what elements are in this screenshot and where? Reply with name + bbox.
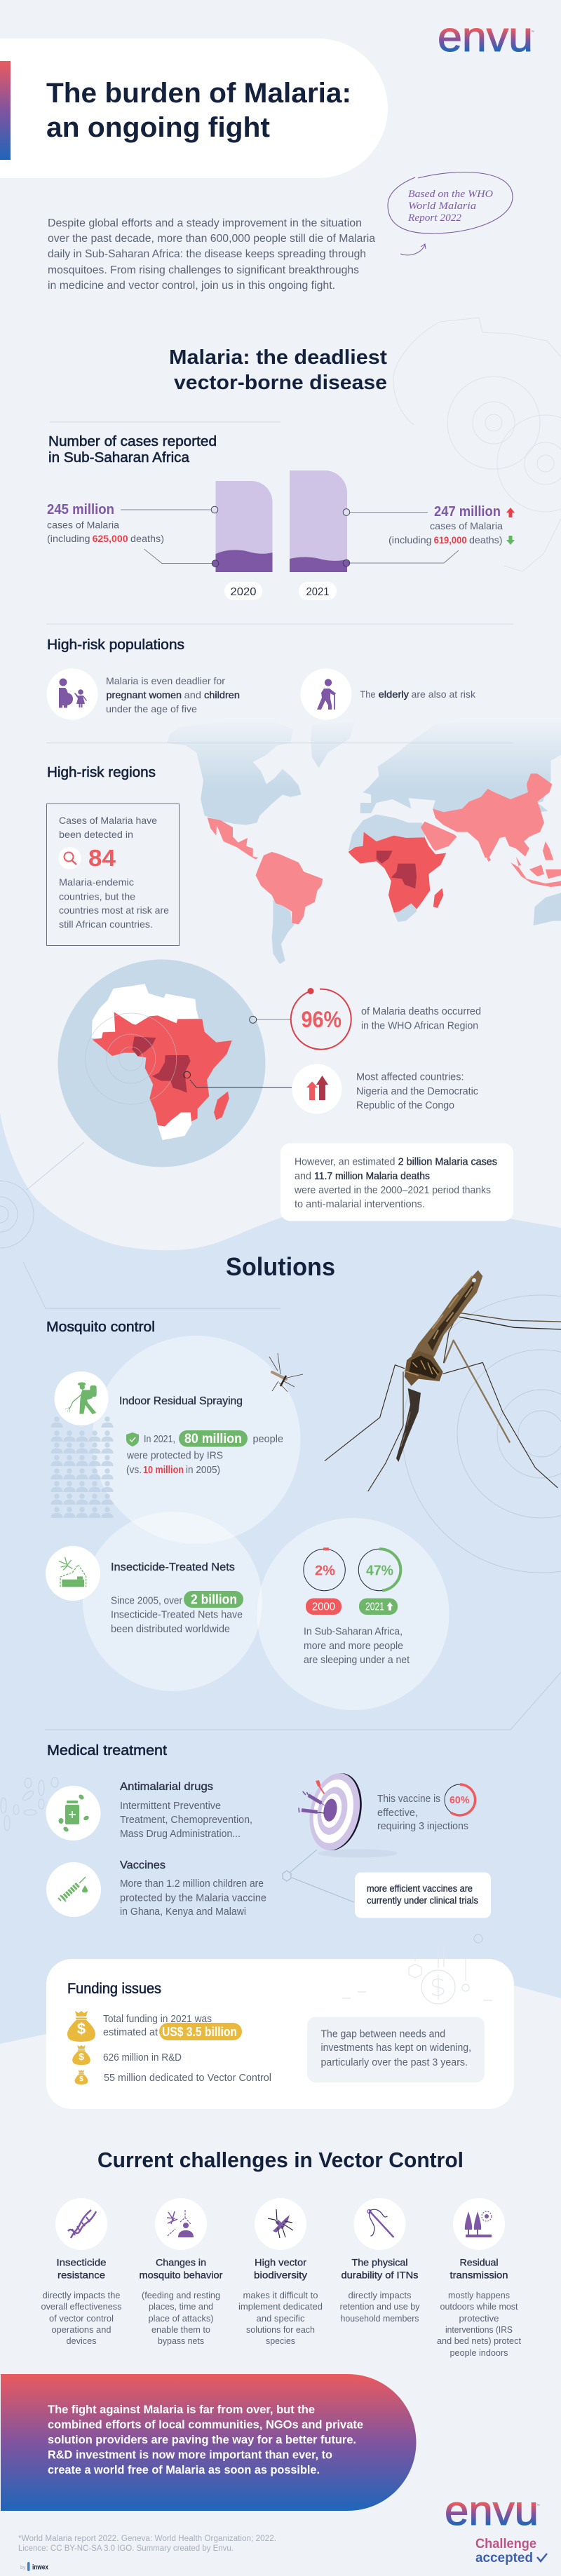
panel: residual transmission — [437, 2198, 521, 2358]
panel: averted cases card: were averted in the 2000–2021 period thanks — [294, 1185, 491, 1196]
footnote: Licence: CC BY-NC-SA 3.0 IGO. Summary created by Envu. — [18, 2544, 234, 2553]
panel: 84 countries box: still African countries. — [59, 918, 153, 930]
footnote: *World Malaria report 2022. Geneva: World Health Organization; 2022. — [18, 2535, 276, 2543]
connector with hexagon — [283, 1850, 354, 1902]
callout: 2020: deaths) — [130, 533, 164, 544]
callout: 2020: cases of Malaria — [47, 519, 119, 530]
panel: insecticide resistance: operations and — [52, 2324, 111, 2335]
panel: residual transmission: protective — [459, 2313, 499, 2324]
decorative faint coin — [342, 1934, 492, 2004]
callout: clinical trials — [355, 1872, 491, 1918]
callout: 2021: cases of Malaria — [430, 520, 503, 531]
credit: by inwex — [20, 2562, 48, 2572]
panel: insecticide resistance: resistance — [58, 2270, 105, 2281]
chart: 96 percent ring — [291, 988, 351, 1050]
panel: mosquito behavior: bypass nets — [158, 2336, 204, 2346]
chart: 47 percent ring: 47% — [366, 1564, 393, 1579]
panel: elderly: are also at risk — [411, 689, 476, 700]
chart: 96 percent ring: 96% — [302, 1007, 342, 1032]
logo: envu top: envu — [438, 13, 533, 60]
panel: vector biodiversity: and specific — [257, 2313, 305, 2324]
panel: mosquito behavior: Changes in — [156, 2257, 206, 2268]
panel: vector biodiversity: implement dedicated — [238, 2301, 323, 2312]
bar chart: 2020 — [230, 586, 257, 598]
panel: elderly: elderly — [379, 689, 409, 700]
panel: insecticide resistance: overall effectiveness — [41, 2301, 122, 2312]
pill: 2000: 2000 — [312, 1601, 335, 1613]
panel: vector biodiversity: High vector — [255, 2257, 306, 2268]
panel: vaccines: Vaccines — [120, 1859, 165, 1871]
title — [46, 78, 351, 143]
panel: ITN durability: durability of ITNs — [341, 2270, 418, 2281]
chart: 2 percent ring: 2% — [315, 1564, 335, 1579]
panel: sleeping under a net: more and more people — [304, 1641, 403, 1652]
callout: 2021: (including — [388, 534, 432, 545]
heading: high-risk regions: High-risk regions — [47, 765, 156, 780]
map: Africa in circle — [58, 959, 265, 1167]
icon: target with syringes — [299, 1768, 398, 1857]
panel: pregnant women and children: pregnant women — [107, 689, 182, 700]
panel: mosquito behavior: places, time and — [149, 2301, 213, 2312]
panel: pregnant women and children — [46, 669, 240, 719]
chart: 2 percent ring — [304, 1549, 345, 1591]
light blue solutions background band — [0, 1112, 561, 2044]
high burden Africa — [349, 832, 446, 913]
text: vaccine effectiveness: requiring 3 injections — [377, 1821, 468, 1832]
panel: 84 countries box: Cases of Malaria have — [59, 815, 157, 826]
panel: pregnant women and children: under the age of five — [106, 703, 197, 714]
intro paragraph: mosquitoes. From rising challenges to significant breakthroughs — [48, 264, 359, 276]
bar chart: 2021 — [306, 586, 330, 598]
intro paragraph: over the past decade, more than 600,000 people still die of Malaria — [48, 233, 375, 245]
panel: residual transmission: transmission — [450, 2270, 508, 2281]
footnote — [18, 2535, 276, 2553]
icon: mother and child — [59, 679, 87, 708]
callout: funding gap: particularly over the past 3 years. — [321, 2057, 468, 2068]
callout: funding gap: The gap between needs and — [321, 2029, 445, 2040]
icon: DNA — [68, 2210, 96, 2238]
icon: magnifier — [59, 847, 81, 869]
title: an ongoing fight — [46, 112, 270, 143]
banner: closing statement: solution providers are paving the way for a better future. — [48, 2434, 356, 2446]
arrow: note pointer — [400, 244, 426, 255]
callout: clinical trials: currently under clinical trials — [367, 1895, 478, 1906]
panel: ITN durability: directly impacts — [348, 2290, 412, 2300]
pill: 80 million: 80 million — [184, 1432, 242, 1446]
panel: indoor residual spraying: (vs. — [126, 1465, 142, 1476]
panel: elderly: The — [360, 689, 376, 700]
heading: deadliest disease: Malaria: the deadliest — [169, 346, 387, 369]
panel: funding issues: 55 million dedicated to Vector Control — [104, 2073, 271, 2084]
gradient accent bar — [0, 61, 11, 160]
handwritten note — [388, 172, 513, 233]
chart: 47 percent ring — [358, 1549, 400, 1591]
panel: vector biodiversity — [238, 2198, 323, 2346]
panel: antimalarial drugs: Intermittent Preventive — [120, 1801, 221, 1812]
panel: ITN durability — [339, 2198, 420, 2324]
pill: 2000 — [306, 1599, 342, 1615]
panel: indoor residual spraying: in 2005) — [186, 1465, 220, 1476]
panel: sleeping under a net: are sleeping under a net — [304, 1655, 410, 1666]
panel: 84 countries box: Malaria-endemic — [59, 876, 134, 888]
panel: averted cases card: and — [295, 1171, 311, 1182]
panel: ITN durability: retention and use by — [339, 2301, 420, 2312]
panel: cases reported — [47, 434, 515, 600]
panel: vector biodiversity: solutions for each — [246, 2324, 315, 2335]
heading: high-risk populations: High-risk populations — [47, 637, 184, 653]
panel: 84 countries box — [46, 804, 180, 945]
panel: vector biodiversity: species — [266, 2336, 295, 2346]
panel: averted cases card: 11.7 million Malaria deaths — [314, 1171, 430, 1182]
heading: mosquito control: Mosquito control — [46, 1320, 155, 1335]
callout: 2021 — [343, 504, 515, 567]
panel: indoor residual spraying: Indoor Residual Spraying — [119, 1395, 243, 1407]
icon: money bag large: $ — [77, 2020, 86, 2038]
tagline: challenge accepted — [475, 2537, 547, 2565]
panel: 84 countries box: countries, but the — [59, 890, 135, 902]
panel: 84 countries box: been detected in — [59, 829, 133, 840]
heading: solutions: Solutions — [226, 1252, 335, 1281]
logo: envu top: ™ — [531, 30, 534, 34]
heading: medical treatment: Medical treatment — [47, 1743, 167, 1758]
decorative faint pills — [1, 1777, 58, 1831]
panel: vector biodiversity: makes it difficult to — [243, 2290, 318, 2300]
icon: up arrow — [506, 508, 515, 517]
callout: 96%: in the WHO African Region — [361, 1021, 478, 1032]
panel: 84 countries box: 84 — [88, 845, 116, 871]
panel: funding issues: estimated at — [103, 2027, 158, 2038]
panel: mosquito behavior: mosquito behavior — [139, 2270, 223, 2281]
pill: 2021: 2021 — [365, 1601, 384, 1613]
pill: 3.5 billion: US$ 3.5 billion — [162, 2025, 237, 2039]
decorative rings behind mosquito — [403, 1295, 561, 1573]
icon: needle and thread — [367, 2209, 394, 2237]
world map — [167, 722, 561, 964]
panel: residual transmission: Residual — [460, 2257, 498, 2268]
text: vaccine effectiveness: This vaccine is — [377, 1794, 440, 1805]
panel: indoor residual spraying: 10 million — [143, 1465, 184, 1476]
icon: down arrow — [506, 536, 515, 545]
panel: vector biodiversity: biodiversity — [254, 2270, 307, 2281]
panel: insecticide resistance: directly impacts the — [42, 2290, 121, 2300]
heading: current challenges: Current challenges in Vector Control — [97, 2148, 464, 2172]
panel: funding issues — [46, 1934, 514, 2109]
panel: residual transmission: people indoors — [450, 2347, 508, 2358]
panel: residual transmission: outdoors while most — [440, 2301, 518, 2312]
logo: envu bottom: envu — [445, 2488, 539, 2534]
callout: 2020: 245 million — [47, 502, 114, 517]
pill: 2 billion: 2 billion — [191, 1593, 237, 1607]
panel: antimalarial drugs — [46, 1781, 252, 1841]
icon: bed net — [59, 1557, 86, 1587]
panel: vaccines: More than 1.2 million children are — [120, 1878, 264, 1890]
panel: averted cases card — [280, 1143, 513, 1221]
title card — [0, 39, 388, 178]
icon: pill bottle — [59, 1794, 90, 1833]
panel: antimalarial drugs: Antimalarial drugs — [120, 1781, 213, 1793]
callout: 2020: (including — [47, 533, 90, 544]
image: large mosquito — [325, 1270, 561, 1491]
icon: trees and sun — [465, 2211, 492, 2237]
callout: most affected countries: Nigeria and the Democratic — [356, 1086, 478, 1097]
bar chart — [216, 470, 347, 600]
subheading: in Sub-Saharan Africa — [48, 450, 190, 466]
decorative ring and line bottom left — [0, 1142, 84, 1308]
icon: sprayer worker — [65, 1382, 97, 1414]
panel: insecticide resistance — [41, 2198, 122, 2346]
pale circles behind solutions — [83, 1336, 449, 1710]
handwritten note: World Malaria — [408, 201, 476, 212]
panel: indoor residual spraying: people — [252, 1434, 283, 1445]
panel: mosquito behavior: enable them to — [151, 2324, 210, 2335]
panel: funding issues: 626 million in R&D — [103, 2052, 182, 2063]
panel: insecticide resistance: of vector control — [49, 2313, 114, 2324]
callout: most affected countries — [184, 1064, 478, 1113]
panel: averted cases card: to anti-malarial interventions. — [295, 1199, 425, 1210]
icon: money bag small — [75, 2070, 88, 2084]
heading: deadliest disease: vector-borne disease — [174, 372, 387, 394]
banner: closing statement: The fight against Malaria is far from over, but the — [48, 2404, 315, 2416]
panel: sleeping under a net: In Sub-Saharan Africa, — [304, 1627, 403, 1638]
icon: money bag medium — [72, 2045, 90, 2065]
intro paragraph — [48, 217, 375, 292]
panel: indoor residual spraying: were protected by IRS — [126, 1450, 223, 1461]
panel: insecticide treated nets: been distributed worldwide — [111, 1624, 230, 1635]
panel: 84 countries box: countries most at risk are — [59, 904, 169, 916]
banner: closing statement: combined efforts of local communities, NGOs and private — [48, 2419, 363, 2432]
callout: 2020: 625,000 — [93, 533, 128, 544]
panel: vaccines: protected by the Malaria vaccine — [120, 1893, 266, 1904]
panel: insecticide treated nets: Insecticide-Treated Nets — [111, 1561, 235, 1573]
panel: ITN durability: household members — [341, 2313, 419, 2324]
panel: pregnant women and children: and — [184, 689, 201, 700]
panel: indoor residual spraying — [50, 1371, 283, 1518]
panel: insecticide resistance: devices — [66, 2336, 97, 2346]
text: vaccine effectiveness: effective, — [377, 1808, 418, 1819]
credit: by inwex: inwex — [32, 2563, 48, 2572]
panel: funding issues: Total funding in 2021 was — [103, 2014, 212, 2025]
panel: insecticide treated nets — [46, 1546, 243, 1635]
panel: mosquito behavior: place of attacks) — [149, 2313, 213, 2324]
callout: 2020 — [47, 502, 219, 567]
panel: ITN durability: The physical — [352, 2257, 408, 2268]
panel: funding issues: Funding issues — [67, 1981, 161, 1997]
panel: insecticide treated nets: Since 2005, over — [111, 1596, 182, 1607]
subheading — [48, 434, 217, 466]
callout: 96%: of Malaria deaths occurred — [361, 1006, 481, 1017]
panel: antimalarial drugs: Mass Drug Administration... — [120, 1829, 241, 1840]
panel: sleeping under a net — [304, 1549, 410, 1666]
panel: residual transmission: interventions (IRS — [445, 2324, 513, 2335]
intro paragraph: Despite global efforts and a steady improvement in the situation — [48, 217, 362, 229]
callout: funding gap: investments has kept on widening, — [321, 2042, 471, 2054]
panel: averted cases card: 2 billion Malaria cases — [398, 1157, 497, 1168]
panel: elderly — [300, 669, 476, 719]
icon: shield — [126, 1432, 139, 1446]
icon: mosquito — [268, 2209, 293, 2238]
panel: residual transmission: and bed nets) protect — [437, 2336, 521, 2346]
icon: rising arrows — [306, 1076, 328, 1100]
panel: vaccines — [46, 1859, 266, 1918]
subheading: Number of cases reported — [48, 434, 217, 449]
icon: mosquito and person — [167, 2210, 194, 2237]
logo: envu bottom: ™ — [536, 2504, 540, 2508]
callout: 2021: deaths) — [469, 534, 502, 545]
intro paragraph: in medicine and vector control, join us in this ongoing fight. — [48, 280, 335, 292]
intro paragraph: daily in Sub-Saharan Africa: the disease keeps spreading through — [48, 248, 366, 260]
panel: residual transmission: mostly happens — [448, 2290, 510, 2300]
panel: indoor residual spraying: In 2021, — [144, 1434, 175, 1445]
handwritten note: Report 2022 — [407, 212, 462, 224]
tagline: challenge accepted: Challenge — [475, 2537, 536, 2551]
text: vaccine effectiveness — [377, 1784, 475, 1832]
panel: averted cases card: However, an estimated — [295, 1157, 396, 1168]
panel: pregnant women and children: children — [204, 689, 240, 700]
icon: elderly person — [317, 679, 336, 710]
decorative background lines and rings: top — [393, 318, 561, 571]
tagline: challenge accepted: accepted — [475, 2551, 533, 2565]
callout: 96% — [250, 988, 481, 1050]
callout: most affected countries: Republic of the Congo — [356, 1100, 454, 1111]
banner: closing statement: create a world free of Malaria as soon as possible. — [48, 2464, 320, 2476]
callout: 2021: 619,000 — [434, 534, 467, 545]
handwritten note: Based on the WHO — [408, 189, 493, 200]
banner: closing statement: R&D investment is now more important than ever, to — [48, 2448, 332, 2461]
callout: clinical trials: more efficient vaccines are — [367, 1883, 473, 1894]
callout: funding gap — [307, 2016, 485, 2082]
chart: 60 percent ring: 60% — [450, 1795, 470, 1806]
panel: vaccines: in Ghana, Kenya and Malawi — [120, 1906, 246, 1918]
icon: syringe — [58, 1877, 88, 1902]
credit: by inwex: by — [20, 2565, 26, 2570]
callout: 2021: 247 million — [434, 504, 501, 520]
title: The burden of Malaria: — [46, 78, 351, 109]
panel: mosquito behavior: (feeding and resting — [142, 2290, 220, 2300]
people pictogram — [50, 1416, 114, 1518]
panel: insecticide treated nets: Insecticide-Treated Nets have — [111, 1610, 243, 1621]
panel: pregnant women and children: Malaria is even deadlier for — [106, 675, 225, 686]
icon: money bag small: $ — [79, 2075, 83, 2083]
panel: antimalarial drugs: Treatment, Chemoprevention, — [120, 1815, 252, 1826]
banner: closing statement — [1, 2374, 417, 2511]
panel: mosquito behavior — [139, 2198, 223, 2346]
panel: insecticide resistance: Insecticide — [56, 2257, 107, 2268]
icon: small mosquito — [269, 1353, 303, 1392]
heading: deadliest disease — [169, 346, 387, 394]
callout: most affected countries: Most affected countries: — [356, 1072, 464, 1083]
icon: money bag medium: $ — [79, 2051, 84, 2062]
icon: money bag large — [67, 2011, 95, 2042]
pill: 2021 — [359, 1599, 398, 1615]
